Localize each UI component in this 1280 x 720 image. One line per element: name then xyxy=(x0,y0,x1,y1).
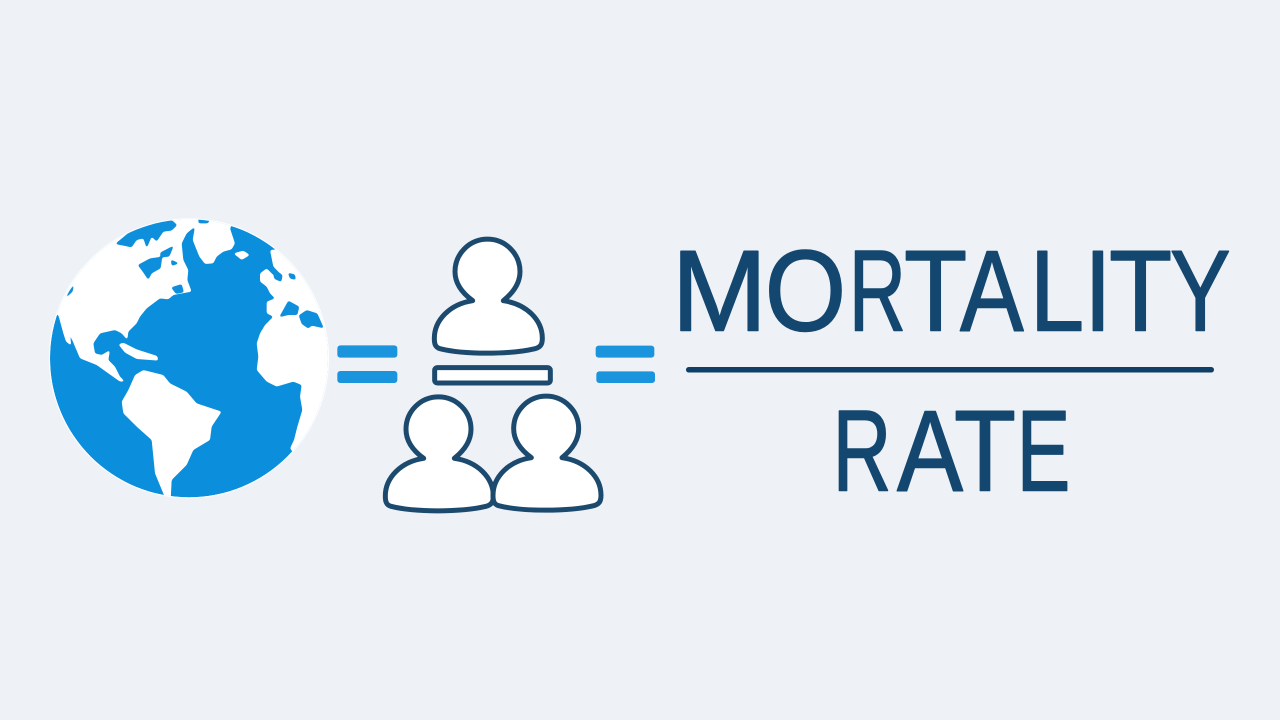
fraction line xyxy=(686,367,1214,372)
heading: MORTALITY: O xyxy=(765,228,846,356)
heading: MORTALITY: I xyxy=(1084,228,1112,356)
heading: MORTALITY: M xyxy=(672,228,767,356)
heading: RATE: A xyxy=(897,388,963,516)
person: numerator xyxy=(434,239,542,353)
equals sign: right xyxy=(596,346,655,383)
heading: RATE: R xyxy=(832,388,892,516)
infographic: mortality rate equation xyxy=(49,218,1230,514)
equals sign: left xyxy=(337,345,397,383)
person: denominator right xyxy=(493,396,601,510)
heading: MORTALITY: A xyxy=(960,228,1024,356)
heading: MORTALITY: L xyxy=(1030,228,1084,356)
heading: RATE: E xyxy=(1017,388,1070,516)
heading: MORTALITY: Y xyxy=(1170,228,1231,356)
person: denominator left xyxy=(385,397,493,511)
heading: MORTALITY: R xyxy=(849,228,906,356)
fraction bar xyxy=(435,368,550,383)
icon: people fraction xyxy=(385,239,601,511)
heading: MORTALITY: T xyxy=(904,228,967,356)
icon: globe xyxy=(40,210,340,500)
heading: MORTALITY: T xyxy=(1109,228,1172,356)
heading: RATE: T xyxy=(954,388,1016,516)
